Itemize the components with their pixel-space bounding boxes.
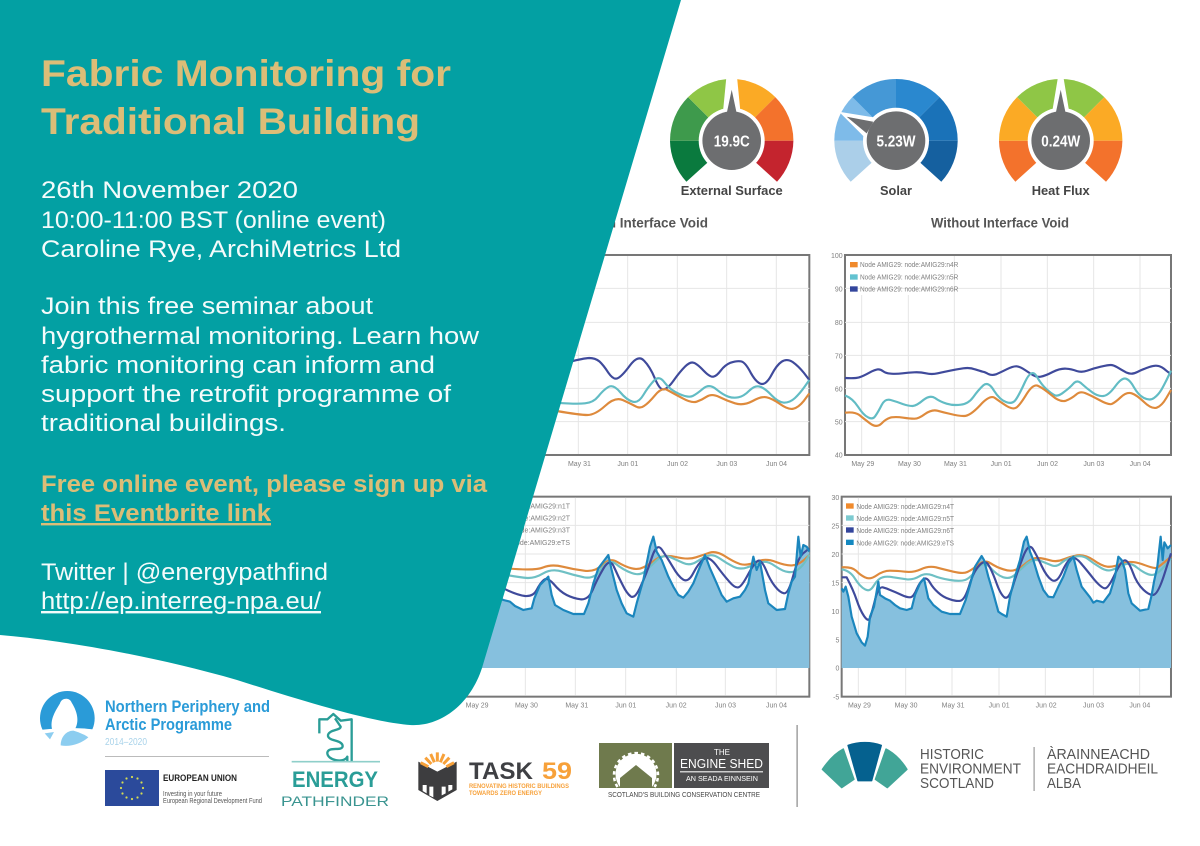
chart: humidity without interface void: Node AMIG29: node:AMIG29:n5R [860, 274, 958, 281]
chart: temperature with interface void: Node AMIG29: node:AMIG29:n3T [465, 528, 571, 535]
chart: temperature without interface void: 30 [832, 495, 839, 502]
chart: humidity without interface void: 80 [835, 320, 843, 327]
chart: humidity without interface void: Jun 01 [991, 461, 1012, 468]
logo: the engine shed: SCOTLAND'S BUILDING CONSERVATION CENTRE [608, 790, 760, 799]
chart: temperature with interface void: May 30 [515, 703, 538, 710]
chart: humidity without interface void: 60 [835, 386, 843, 393]
chart: humidity without interface void: May 29 [851, 461, 874, 468]
chart: temperature without interface void: Jun 01 [989, 703, 1010, 710]
logo: historic environment scotland: ALBA [1047, 776, 1081, 792]
contact links [41, 559, 328, 615]
chart: temperature without interface void: Jun 03 [1083, 703, 1104, 710]
chart: humidity with interface void: Jun 03 [716, 461, 737, 468]
icon: tower with winding path [292, 714, 380, 762]
sign up call to action: this Eventbrite link [41, 500, 272, 527]
gauge: external surface: External Surface [681, 183, 783, 198]
chart: humidity without interface void: Jun 03 [1083, 461, 1104, 468]
title: Fabric Monitoring for [41, 53, 451, 94]
chart: temperature without interface void: 0 [835, 666, 839, 673]
logo: the engine shed: THE [714, 748, 730, 757]
chart: temperature without interface void: 10 [832, 609, 839, 616]
logo: task 59: 59 [542, 758, 572, 785]
chart: temperature with interface void: May 29 [466, 703, 489, 710]
logo: northern periphery and arctic programme: Investing in your future [163, 791, 222, 798]
seminar description: traditional buildings. [41, 410, 286, 437]
logo: task 59: TASK [469, 758, 534, 785]
chart: humidity without interface void: 100 [831, 253, 843, 260]
logo: northern periphery and arctic programme: Northern Periphery and [105, 698, 270, 716]
chart: humidity without interface void: 70 [835, 353, 843, 360]
chart: humidity with interface void: Jun 02 [667, 461, 688, 468]
seminar description: Join this free seminar about [41, 293, 373, 320]
icon: building with sun rays [418, 752, 457, 801]
chart: temperature with interface void: Jun 04 [766, 703, 787, 710]
logo: the engine shed [599, 743, 769, 799]
sign up call to action: Free online event, please sign up via [41, 471, 488, 498]
chart: temperature without interface void: 15 [832, 581, 839, 588]
logo: historic environment scotland: HISTORIC [920, 747, 984, 763]
event details: 10:00-11:00 BST (online event) [41, 207, 386, 234]
icon: three arc segments [822, 743, 907, 788]
chart: temperature with interface void: Node AMIG29: node:AMIG29:eTS [464, 540, 570, 547]
chart: temperature with interface void: Node AMIG29: node:AMIG29:n1T [465, 504, 571, 511]
chart: temperature without interface void: May 29 [848, 703, 871, 710]
event details [41, 177, 401, 263]
chart: temperature without interface void: Node AMIG29: node:AMIG29:n5T [856, 516, 955, 523]
chart: humidity with interface void [440, 255, 809, 468]
gauge: heat flux: Heat Flux [1032, 183, 1090, 198]
logo: northern periphery and arctic programme: European Regional Development Fund [163, 798, 262, 805]
icon: bird in circle [39, 691, 96, 748]
chart: humidity without interface void: 40 [835, 453, 843, 460]
sign up call to action [41, 471, 488, 527]
icon: gear and house [614, 753, 658, 788]
chart: humidity without interface void: Jun 02 [1037, 461, 1058, 468]
chart: temperature with interface void: Jun 03 [715, 703, 736, 710]
title: Traditional Building [41, 101, 420, 142]
chart: humidity without interface void: Jun 04 [1130, 461, 1151, 468]
gauge: solar: Solar [880, 183, 912, 198]
logo: historic environment scotland: EACHDRAIDHEIL [1047, 762, 1158, 778]
chart: temperature without interface void: 5 [835, 637, 839, 644]
chart: temperature without interface void [832, 495, 1171, 710]
icon: european union flag [105, 770, 159, 806]
seminar description [41, 293, 480, 437]
gauge: heat flux [999, 79, 1122, 198]
gauge: external surface: 19.9C [714, 134, 750, 151]
logo: historic environment scotland: ENVIRONMENT [920, 762, 1021, 778]
gauge: external surface [670, 79, 793, 198]
heading: with interface void: With Interface Void [587, 216, 708, 230]
chart: temperature with interface void: May 31 [565, 703, 588, 710]
contact links: Twitter | @energypathfind [41, 559, 328, 586]
seminar description: hygrothermal monitoring. Learn how [41, 323, 480, 350]
seminar description: fabric monitoring can inform and [41, 352, 435, 379]
logo: historic environment scotland: SCOTLAND [920, 776, 994, 792]
logo: energy pathfinder [281, 714, 389, 809]
gauge: heat flux: 0.24W [1041, 134, 1081, 151]
logo: energy pathfinder: PATHFINDER [281, 793, 389, 809]
chart: humidity with interface void: Jun 04 [766, 461, 787, 468]
chart: temperature without interface void: Node AMIG29: node:AMIG29:n6T [856, 528, 955, 535]
seminar description: support the retrofit programme of [41, 381, 451, 408]
chart: temperature without interface void: Jun 02 [1036, 703, 1057, 710]
chart: temperature without interface void: Node AMIG29: node:AMIG29:n4T [856, 504, 955, 511]
title [41, 53, 451, 142]
chart: temperature without interface void: May 31 [942, 703, 965, 710]
chart: humidity without interface void: May 31 [944, 461, 967, 468]
logo: task 59: TOWARDS ZERO ENERGY [469, 790, 543, 797]
chart: temperature without interface void: May 30 [895, 703, 918, 710]
chart: temperature without interface void: 20 [832, 552, 839, 559]
event details: 26th November 2020 [41, 177, 298, 204]
chart: humidity without interface void: 90 [835, 287, 843, 294]
logo: task 59: RENOVATING HISTORIC BUILDINGS [469, 783, 570, 790]
panel: teal event information [0, 0, 681, 725]
logo: task 59 [418, 752, 572, 801]
heading: without interface void: Without Interface Void [931, 216, 1069, 230]
logo: northern periphery and arctic programme: EUROPEAN UNION [163, 773, 237, 784]
gauge: solar: 5.23W [876, 134, 916, 151]
chart: temperature without interface void: 25 [832, 523, 839, 530]
logo: historic environment scotland [822, 743, 1158, 792]
chart: humidity with interface void: May 31 [568, 461, 591, 468]
logo: northern periphery and arctic programme [39, 691, 270, 806]
chart: humidity with interface void: Jun 01 [617, 461, 638, 468]
chart: temperature without interface void: Node AMIG29: node:AMIG29:eTS [856, 540, 954, 547]
chart: temperature without interface void: -5 [833, 694, 839, 701]
chart: temperature with interface void: Jun 02 [666, 703, 687, 710]
chart: humidity without interface void: Node AMIG29: node:AMIG29:n4R [860, 262, 958, 269]
chart: temperature with interface void: Jun 01 [615, 703, 636, 710]
contact links: http://ep.interreg-npa.eu/ [41, 588, 321, 615]
chart: temperature without interface void: Jun 04 [1129, 703, 1150, 710]
chart: temperature with interface void: Node AMIG29: node:AMIG29:n2T [465, 516, 571, 523]
chart: humidity without interface void: 50 [835, 419, 843, 426]
logo: historic environment scotland: ÀRAINNEACHD [1047, 746, 1150, 763]
gauge: solar [834, 79, 958, 198]
logo: energy pathfinder: ENERGY [292, 767, 378, 792]
logo: the engine shed: ENGINE SHED [680, 756, 763, 771]
event details: Caroline Rye, ArchiMetrics Ltd [41, 236, 401, 263]
chart: humidity without interface void [831, 253, 1171, 468]
logo: northern periphery and arctic programme: 2014–2020 [105, 737, 147, 748]
chart: temperature with interface void [440, 497, 809, 710]
chart: humidity without interface void: May 30 [898, 461, 921, 468]
logo: northern periphery and arctic programme: Arctic Programme [105, 716, 232, 734]
chart: humidity without interface void: Node AMIG29: node:AMIG29:n6R [860, 286, 958, 293]
logo: the engine shed: AN SEADA EINNSEIN [686, 776, 758, 783]
